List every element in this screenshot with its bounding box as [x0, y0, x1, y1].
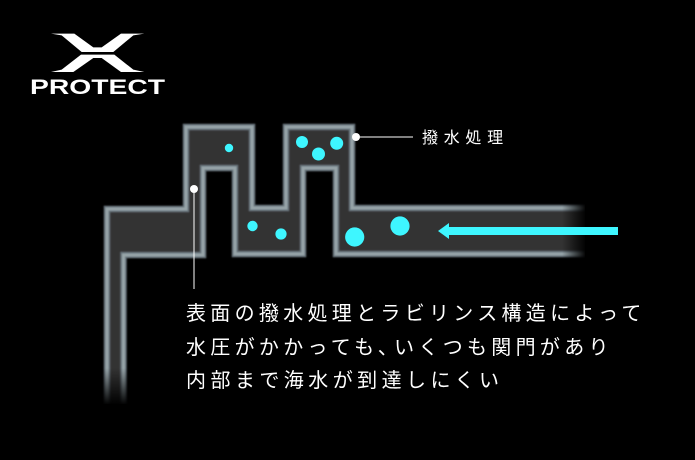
channel inner wall: [124, 168, 590, 405]
icon: X mark: [51, 34, 144, 72]
pointer line: [193, 189, 195, 289]
description text: 内部まで海水が到達しにくい: [186, 369, 503, 392]
fade out bottom: [98, 368, 134, 405]
description text: 水圧がかかっても、いくつも関門があり: [186, 336, 613, 359]
callout: water repellent label: [352, 129, 509, 147]
fade out right: [562, 200, 586, 262]
description text: [186, 302, 646, 392]
channel outer wall: [107, 127, 590, 405]
callout text: 撥水処理: [422, 129, 509, 147]
logo: X PROTECT: [30, 34, 165, 99]
pointer dot: [190, 185, 198, 193]
callout: lower pointer: [190, 185, 198, 289]
diagram: labyrinth channel: [98, 127, 597, 412]
callout line: [356, 136, 413, 138]
channel fill: [107, 127, 590, 405]
logo wordmark: PROTECT: [30, 76, 165, 99]
callout dot: [352, 133, 360, 141]
description text: 表面の撥水処理とラビリンス構造によって: [186, 302, 646, 325]
arrow: water pressure direction: [438, 223, 618, 239]
water droplets: [225, 136, 410, 247]
